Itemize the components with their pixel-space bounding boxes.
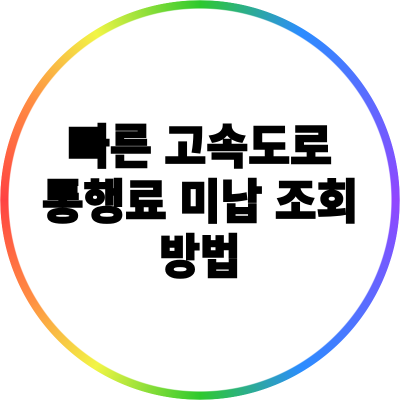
title: 빠른 고속도로 (68, 120, 332, 174)
title: 통행료 미납 조회 (42, 176, 358, 228)
title: 방법 (160, 230, 240, 284)
